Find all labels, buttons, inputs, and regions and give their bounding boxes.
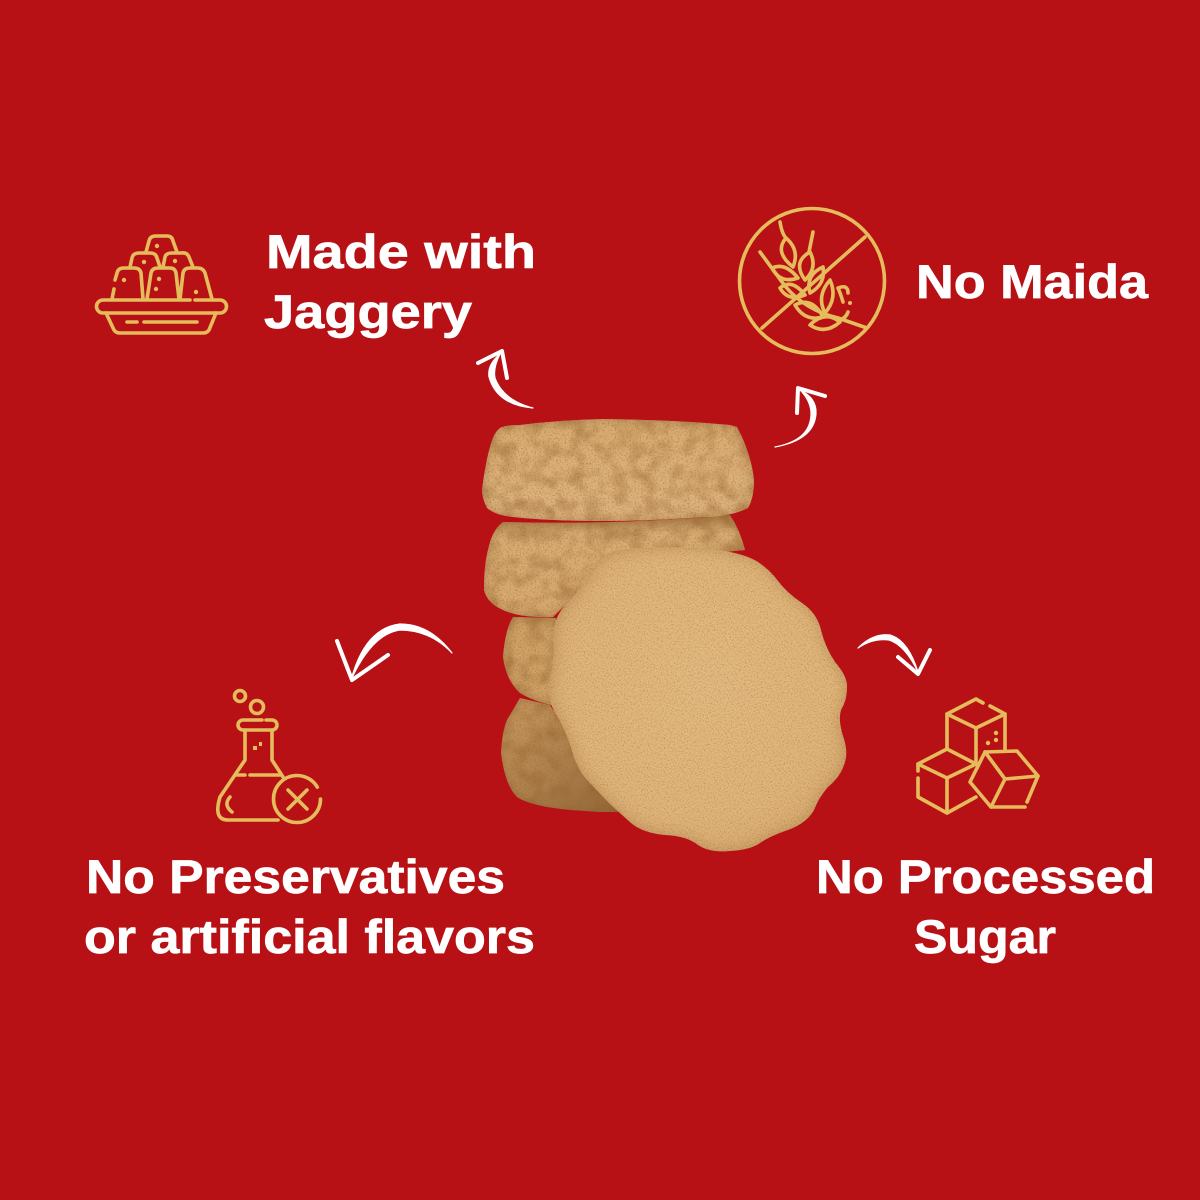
heading: no preservatives: No Preservatives — [86, 850, 505, 903]
arrow: to no processed sugar — [858, 635, 930, 674]
cookie: second — [484, 515, 745, 617]
heading: no preservatives: or artificial flavors — [84, 910, 535, 963]
arrow: to no maida — [775, 388, 825, 447]
icon: jaggery tray — [96, 236, 226, 333]
icon: flask with cross — [218, 690, 320, 822]
heading: no processed sugar: Sugar — [914, 910, 1056, 963]
heading: made with jaggery: Jaggery — [264, 285, 472, 338]
heading: made with jaggery: Made with — [266, 225, 536, 278]
arrow: to jaggery — [478, 351, 533, 408]
heading: made with jaggery — [264, 225, 536, 338]
cookie: third — [503, 617, 556, 706]
heading: no processed sugar — [816, 850, 1155, 963]
cookie: top — [482, 419, 754, 521]
heading: no maida: No Maida — [916, 255, 1149, 308]
cookie: bottom — [501, 698, 620, 812]
icon: no maida wheat — [740, 208, 884, 354]
icon: sugar cubes — [918, 699, 1038, 813]
heading: no preservatives — [84, 850, 535, 963]
cookie stack — [482, 419, 847, 851]
heading: no processed sugar: No Processed — [816, 850, 1155, 903]
arrow: to no preservatives — [337, 624, 452, 680]
cookie: front large — [549, 547, 847, 851]
